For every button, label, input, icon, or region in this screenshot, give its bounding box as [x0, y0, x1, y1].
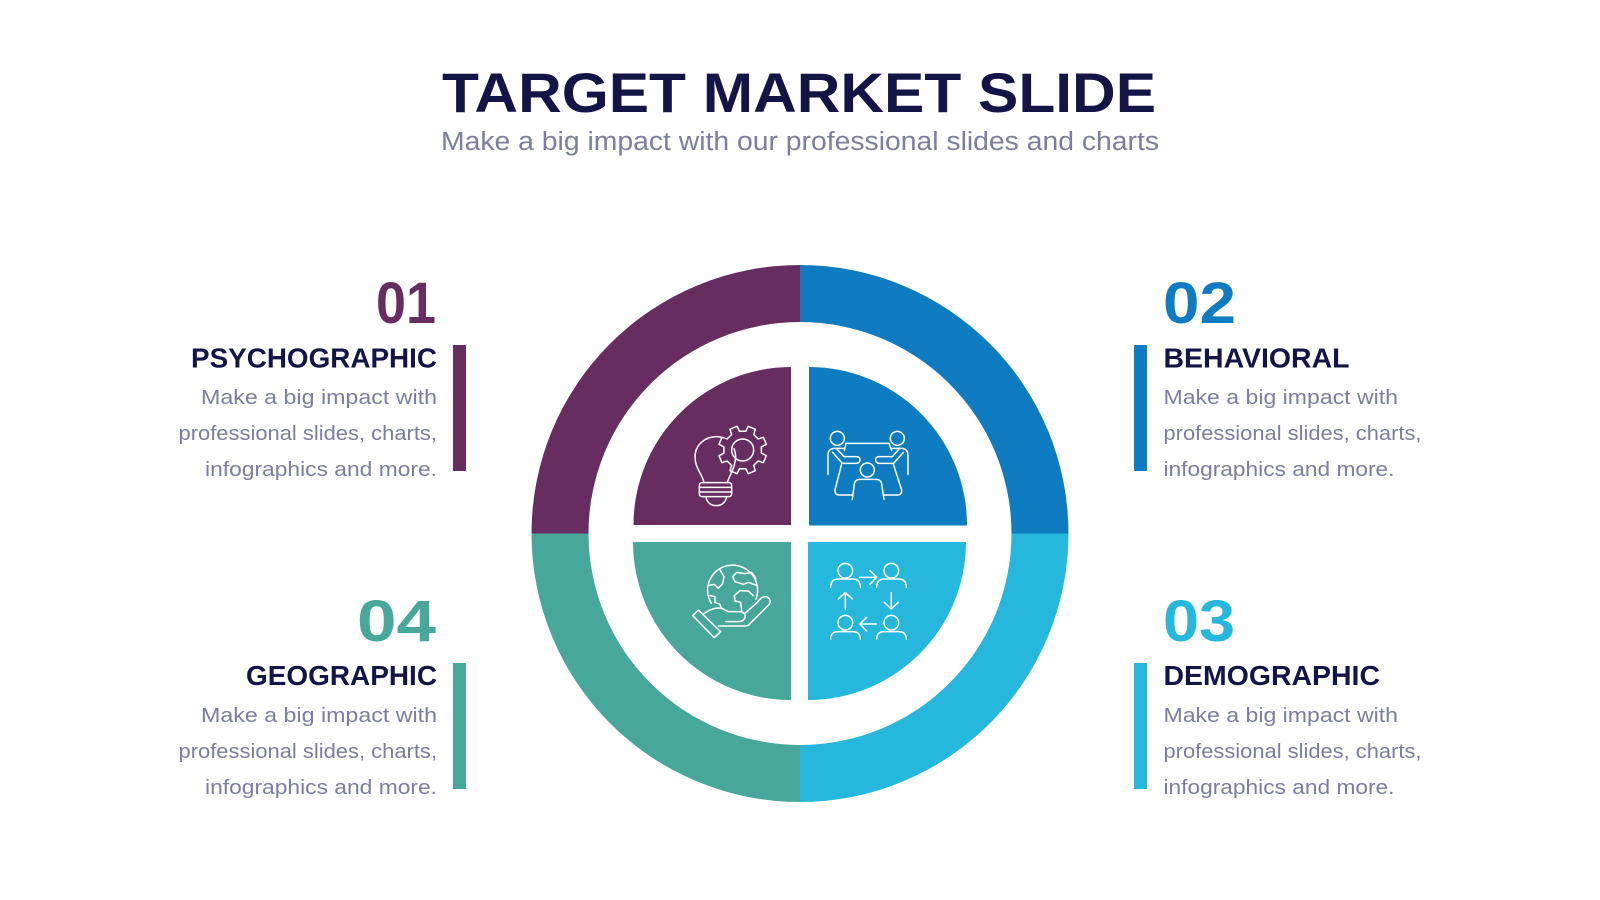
description: behavioral: professional slides, charts, [1164, 422, 1422, 445]
panel: 02 behavioral [1134, 271, 1422, 481]
ring segment: teal [532, 534, 800, 802]
icon: people around a table [828, 431, 908, 499]
description: psychographic: Make a big impact with [201, 386, 437, 409]
description: demographic: infographics and more. [1164, 776, 1394, 799]
icon: people exchange cycle [831, 563, 906, 639]
description: geographic: Make a big impact with [201, 704, 437, 727]
description: behavioral: infographics and more. [1164, 458, 1394, 481]
number 04: 04 [357, 589, 436, 654]
description: psychographic: professional slides, charts, [178, 422, 437, 445]
description: geographic: infographics and more. [205, 776, 437, 799]
ring segment: purple [532, 265, 800, 534]
heading: geographic: GEOGRAPHIC [246, 660, 437, 691]
description: psychographic: infographics and more. [205, 458, 437, 481]
accent bar: psychographic [453, 345, 466, 471]
accent bar: behavioral [1134, 345, 1147, 471]
heading: demographic: DEMOGRAPHIC [1164, 660, 1380, 691]
panel: 01 psychographic [178, 271, 466, 481]
panel: 03 demographic [1134, 589, 1422, 799]
description: psychographic [178, 386, 437, 481]
description: demographic [1164, 704, 1422, 799]
icon: light bulb and gear [695, 426, 766, 506]
ring segment: cyan [800, 534, 1068, 802]
accent bar: geographic [453, 663, 466, 789]
donut ring [532, 265, 1068, 802]
number 01: 01 [376, 271, 436, 336]
description: geographic: professional slides, charts, [178, 740, 437, 763]
quadrant: purple with bulb icon [634, 367, 791, 525]
heading: psychographic: PSYCHOGRAPHIC [191, 342, 437, 374]
accent bar: demographic [1134, 663, 1147, 789]
subtitle: Make a big impact with our professional slides and charts [441, 128, 1159, 156]
quadrant: cyan with exchange icon [808, 542, 966, 700]
description: demographic: Make a big impact with [1164, 704, 1398, 727]
icon: globe in hand [693, 565, 770, 638]
heading: behavioral: BEHAVIORAL [1164, 342, 1350, 374]
number 02: 02 [1163, 271, 1236, 336]
description: demographic: professional slides, charts, [1164, 740, 1422, 763]
ring segment: blue [800, 265, 1068, 534]
quadrant: teal with globe icon [633, 542, 791, 700]
description: behavioral: Make a big impact with [1164, 386, 1398, 409]
quadrant: blue with meeting icon [809, 367, 967, 526]
number 03: 03 [1163, 589, 1235, 654]
panel: 04 geographic [178, 589, 466, 799]
title: TARGET MARKET SLIDE [442, 61, 1156, 124]
description: behavioral [1164, 386, 1422, 481]
description: geographic [178, 704, 437, 799]
